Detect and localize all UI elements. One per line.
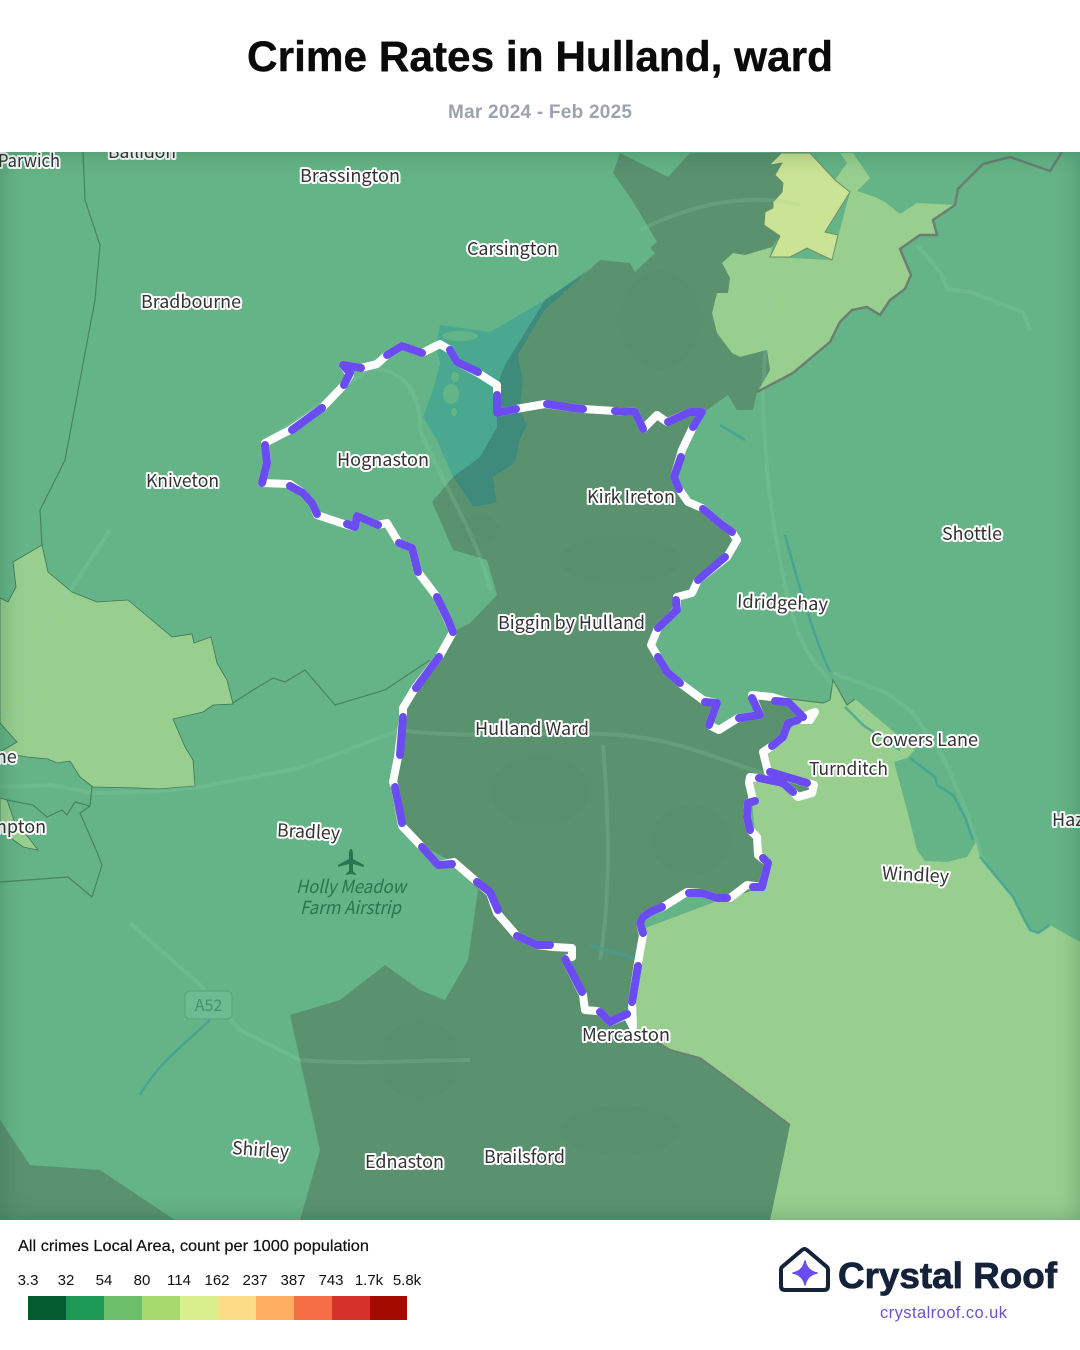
ward boundary: white line [262, 344, 815, 1027]
airstrip label: Holly Meadow [296, 873, 408, 899]
road shield: A52 [185, 991, 232, 1019]
water features [140, 425, 1050, 1095]
place labels: Brassington [300, 162, 400, 188]
darker woodland patches [380, 270, 730, 1155]
icon: airstrip plane [338, 849, 364, 875]
header [247, 33, 833, 123]
legend scale labels: 162 [204, 1272, 230, 1289]
legend scale labels: 3.3 [18, 1272, 38, 1289]
place labels: Idridgehay [737, 587, 829, 617]
place labels: Turnditch [809, 755, 888, 781]
place labels: Hognaston [337, 446, 429, 472]
airstrip label: Farm Airstrip [300, 894, 403, 920]
place labels: Hulland Ward [475, 715, 589, 741]
legend scale labels: 54 [96, 1272, 112, 1289]
thick grey boundary, south [633, 1027, 790, 1125]
date range subtitle: Mar 2024 - Feb 2025 [448, 102, 632, 123]
place labels: Biggin by Hulland [498, 609, 645, 635]
footer [18, 1238, 1058, 1322]
map edge vignette [0, 152, 1080, 1220]
legend scale labels: 237 [242, 1272, 268, 1289]
place labels: Carsington [467, 235, 558, 261]
legend scale labels: 1.7k [355, 1272, 384, 1289]
place labels: Windley [881, 859, 950, 889]
region: north-east light stripe [835, 153, 870, 192]
place labels: Ednaston [365, 1148, 444, 1174]
place labels: Kniveton [146, 467, 219, 493]
legend scale labels: 32 [58, 1272, 74, 1289]
place labels: Bradley [276, 816, 341, 846]
website link text: crystalroof.co.uk [880, 1304, 1008, 1322]
region: dark teal [453, 262, 600, 507]
thick grey boundary, north-east [757, 152, 1062, 392]
place labels: Kirk Ireton [587, 483, 675, 509]
region: light green west [0, 545, 233, 789]
map [0, 152, 1080, 1220]
airstrip label [296, 873, 408, 920]
legend scale labels: 80 [134, 1272, 150, 1289]
region: Hulland ward and dark neighbours [290, 153, 812, 1220]
place labels: Shirley [231, 1134, 291, 1164]
place labels [0, 138, 1080, 1174]
legend scale labels [18, 1272, 422, 1289]
legend scale labels: 114 [167, 1272, 191, 1289]
boundary lines [0, 152, 855, 897]
legend scale labels: 743 [318, 1272, 344, 1289]
legend scale labels: 387 [280, 1272, 306, 1289]
region: south-east light green [633, 680, 1080, 1220]
region: lightest yellow-green [764, 153, 850, 260]
logo icon: house with star [781, 1249, 828, 1290]
ward boundary: purple dashes [262, 346, 807, 1022]
place labels: Brailsford [484, 1143, 565, 1169]
title: Crime Rates in Hulland, ward [247, 33, 833, 81]
legend title: All crimes Local Area, count per 1000 population [18, 1238, 369, 1255]
region: teal lake area [423, 268, 590, 477]
region: bottom-left dark corner [0, 1120, 175, 1220]
region: north-east light green [712, 191, 955, 392]
road shield: A52: A52 [195, 992, 222, 1016]
roads [0, 200, 1030, 1062]
place labels: Mercaston [582, 1021, 670, 1047]
place labels: Bradbourne [141, 288, 241, 314]
place labels: Shottle [942, 520, 1002, 546]
logo wordmark: Crystal Roof [838, 1255, 1058, 1296]
region: small light area at west edge [0, 798, 38, 850]
legend colour bar [28, 1296, 407, 1320]
legend scale labels: 5.8k [393, 1272, 422, 1289]
lake islands [442, 331, 478, 416]
place labels: Cowers Lane [871, 726, 978, 752]
